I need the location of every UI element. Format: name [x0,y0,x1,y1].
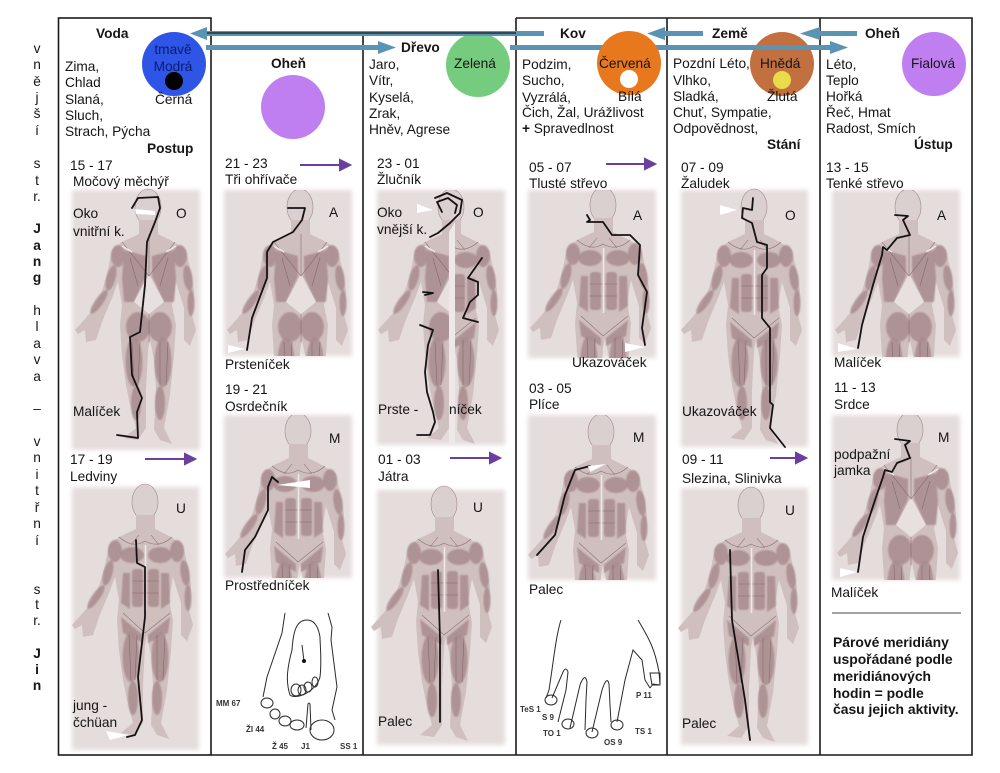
side label: vnější str. Jang hlava – vnitřní str. Jin: s [34,582,41,597]
arrow: purple to next column [606,159,655,169]
text block: qualities: Kyselá, [369,90,414,105]
side label: vnější str. Jang hlava – vnitřní str. Jin [33,41,41,693]
side label: vnější str. Jang hlava – vnitřní str. Jin: n [33,516,41,531]
diagram: hand with meridian points: P 11 [636,691,652,700]
meridian heading: Žaludek: Žaludek [681,176,730,191]
colour label: Zelená: Zelená [454,56,496,71]
panel: Oheň column [216,56,358,751]
figure: bladder meridian, back view: Oko [73,206,98,221]
figure: pericardium meridian, half body front [224,413,352,668]
figure: large intestine meridian, half body front [528,187,656,442]
meridian heading: Tři ohřívače: Tři ohřívače [225,172,297,187]
text block: qualities: Slaná, [65,92,104,107]
side label: vnější str. Jang hlava – vnitřní str. Jin: i [35,467,39,482]
meridian heading: Slezina, Slinivka: Slezina, Slinivka [682,471,782,486]
figure: small intestine meridian, half body back: A [937,208,947,223]
figure: bladder meridian, back view: vnitřní k. [73,224,125,239]
side label: vnější str. Jang hlava – vnitřní str. Jin: g [33,270,41,285]
diagram: hand with meridian points: OS 9 [604,738,623,747]
heading: Kov: Kov [560,26,586,41]
text block: qualities: Pozdní Léto, [673,56,750,71]
panel: Kov column [520,26,661,747]
meridian heading: Ledviny [70,452,117,484]
figure: stomach meridian, front view: O [785,208,796,223]
colour label: žlutá: Žlutá [767,89,798,104]
text block: qualities [65,59,151,139]
meridian heading: Močový měchýř: 15 - 17 [70,158,113,173]
text block: qualities: Chlad [65,75,101,90]
direction: Postup: Postup [147,141,193,156]
finger label: Ukazováček: Ukazováček [572,355,647,370]
side label: vnější str. Jang hlava – vnitřní str. Jin: í [35,123,39,138]
panel: Voda column [65,26,206,750]
figure: spleen meridian, front view [678,487,808,745]
element circle: červená [597,31,661,95]
figure: large intestine meridian, half body front: A [633,208,643,223]
side label: vnější str. Jang hlava – vnitřní str. Jin: n [33,450,41,465]
element circle: fialová [902,32,966,96]
organ colour dot: žlutá [773,71,791,89]
arrow: purple to next column [300,160,350,170]
direction: Ústup: Ústup [914,137,953,152]
figure: bladder meridian, back view: O [176,206,187,221]
side label: vnější str. Jang hlava – vnitřní str. Jin: n [33,254,41,269]
heading: Země: Země [712,26,748,41]
colour label: hnědá: Hnědá [760,56,801,71]
meridian heading: Tenké střevo [826,160,904,191]
heading: Oheň: Oheň [271,56,306,71]
figure: heart meridian, half body back [832,412,960,667]
figure: triple heater meridian, half body back [224,189,352,444]
diagram: hand with meridian points: TS 1 [635,727,652,736]
panel: Oheň column (right) [826,26,966,717]
side label: vnější str. Jang hlava – vnitřní str. Jin: h [33,303,41,318]
figure: kidney meridian, front view [72,484,199,750]
meridian heading: Žaludek: 07 - 09 [681,160,724,175]
panel: Země column [673,26,814,745]
side label: vnější str. Jang hlava – vnitřní str. Jin: i [35,662,39,677]
side label: vnější str. Jang hlava – vnitřní str. Jin: n [33,57,41,72]
side label: vnější str. Jang hlava – vnitřní str. Jin: a [33,336,41,351]
side label: vnější str. Jang hlava – vnitřní str. Jin: – [33,401,41,416]
text block: qualities: Zima, [65,59,99,74]
side label: vnější str. Jang hlava – vnitřní str. Jin: J [33,646,41,661]
note: paired meridians: času jejich aktivity. [833,701,959,717]
meridian heading: Plíce [529,381,572,412]
meridian heading: Tlusté střevo [529,160,608,191]
meridian heading: Tři ohřívače [225,156,297,187]
side label: vnější str. Jang hlava – vnitřní str. Jin: r. [33,189,41,204]
note: paired meridians: uspořádané podle [833,651,953,667]
side label: vnější str. Jang hlava – vnitřní str. Jin: v [34,41,41,56]
text block: qualities: Vyzrálá, [522,90,571,105]
element circle: zelená [446,33,510,97]
text block: qualities: Sucho, [522,73,565,88]
figure: stomach meridian, front view [681,189,808,447]
text block: qualities: Řeč, Hmat [826,105,891,120]
figure: kidney meridian, front view: čchüan [73,715,117,730]
figure: gall bladder meridian, half back half front view: vnější k. [377,222,427,237]
diagram: foot with meridian points: Ž 45 [272,742,289,751]
text block: qualities: Teplo [826,73,859,88]
meridian heading: Osrdečník: 19 - 21 [225,382,268,397]
organ colour dot: bílá [620,70,638,88]
meridian heading: Tři ohřívače: 21 - 23 [225,156,268,171]
side label: vnější str. Jang hlava – vnitřní str. Jin: l [35,319,39,334]
text block: qualities [826,57,916,136]
side label: vnější str. Jang hlava – vnitřní str. Jin: t [35,173,39,188]
meridian heading: Plíce: 03 - 05 [529,381,572,396]
finger label: Prsteníček: Prsteníček [225,357,290,372]
diagram: foot with meridian points: J1 [301,742,310,751]
side label: vnější str. Jang hlava – vnitřní str. Jin: v [34,434,41,449]
side label: vnější str. Jang hlava – vnitřní str. Jin: s [34,156,41,171]
text block: qualities: Čich, Žal, Urážlivost [522,105,644,120]
figure: triple heater meridian, half body back: A [329,205,339,220]
diagram: foot with meridian points [216,613,358,751]
text block: qualities: Sluch, [65,108,103,123]
text block: qualities: Sladká, [673,89,719,104]
organ colour dot: černá [165,72,183,90]
side label: vnější str. Jang hlava – vnitřní str. Jin: ř [35,500,40,515]
figure: pericardium meridian, half body front: M [329,431,340,446]
note: paired meridians [833,634,959,717]
meridian heading: Žlučník: 23 - 01 [377,156,420,171]
figure: heart meridian, half body back: jamka [833,463,871,478]
side label: vnější str. Jang hlava – vnitřní str. Jin: t [35,597,39,612]
figure: spleen meridian, front view: Palec [682,716,716,731]
figure: gall bladder meridian, half back half front view: O [473,205,484,220]
side label: vnější str. Jang hlava – vnitřní str. Jin: í [35,533,39,548]
figure: bladder meridian, back view [72,189,200,450]
colour label: tmavě modrá: tmavě [154,42,192,57]
diagram: foot with meridian points: ŽI 44 [246,725,265,734]
side label: vnější str. Jang hlava – vnitřní str. Jin: n [33,678,41,693]
figure: heart meridian, half body back: M [938,430,949,445]
figure: liver meridian, front view: U [473,500,483,515]
meridian heading: Játra: 01 - 03 [378,452,421,467]
meridian heading: Močový měchýř: Močový měchýř [73,174,169,189]
note: paired meridians: Párové meridiány [833,634,949,650]
side label: vnější str. Jang hlava – vnitřní str. Jin: a [33,238,41,253]
text block: qualities: Vítr, [369,73,393,88]
side label: vnější str. Jang hlava – vnitřní str. Jin: t [35,483,39,498]
text block: qualities: Léto, [826,57,856,72]
figure: liver meridian, front view [371,486,505,745]
meridian heading: Močový měchýř [70,158,169,189]
figure: lung meridian, half body front: M [633,430,644,445]
diagram: foot with meridian points: MM 67 [216,699,241,708]
meridian heading: Srdce: Srdce [834,397,870,412]
meridian heading: Žlučník [377,156,421,187]
figure: stomach meridian, front view: Ukazováček [682,404,757,419]
side label: vnější str. Jang hlava – vnitřní str. Jin: š [34,106,41,121]
arrow: purple to next column [770,453,806,463]
side label: vnější str. Jang hlava – vnitřní str. Jin: J [33,221,41,236]
finger label: Malíček: Malíček [834,355,881,370]
figure: spleen meridian, front view: U [785,503,795,518]
text block: qualities: Podzim, [522,57,571,72]
meridian heading: Ledviny: Ledviny [70,469,117,484]
colour label: fialová: Fialová [911,56,956,71]
meridian heading: Osrdečník [225,382,288,414]
text block: qualities: Jaro, [369,57,399,72]
arrows: blue cycle arrows between elements [190,27,857,54]
diagram: hand with meridian points: TO 1 [543,729,561,738]
meridian heading: Žlučník: Žlučník [377,172,421,187]
finger label: Palec: Palec [529,582,563,597]
colour label: černá: Černá [155,92,193,107]
meridian heading: Slezina, Slinivka [682,452,782,486]
text block: qualities: Odpovědnost, [673,121,758,136]
heading: Voda: Voda [96,26,129,41]
diagram: foot with meridian points: SS 1 [340,742,358,751]
colour label: tmavě modrá: Modrá [154,59,193,74]
side label: vnější str. Jang hlava – vnitřní str. Jin: r. [33,613,41,628]
meridian heading: Srdce: 11 - 13 [834,380,876,395]
heading: Oheň: Oheň [865,26,900,41]
figure: gall bladder meridian, half back half front view: Prste - [378,402,418,417]
meridian heading: Tenké střevo: 13 - 15 [826,160,869,175]
figure: kidney meridian, front view: U [176,501,186,516]
text block: qualities [369,57,450,137]
finger label: Malíček: Malíček [831,585,878,600]
text block: qualities: Hořká [826,89,863,104]
text block: qualities: Chuť, Sympatie, [673,105,772,120]
panel: Dřevo column [369,33,510,745]
text block: qualities: Zrak, [369,106,400,121]
figure: bladder meridian, back view: Malíček [73,404,120,419]
colour label: bílá: Bílá [618,89,642,104]
meridian heading: Plíce: Plíce [529,397,559,412]
figure: kidney meridian, front view: jung - [72,698,107,713]
figure: gall bladder meridian, half back half front view: níček [449,402,482,417]
meridian heading: Játra [378,452,421,484]
arrow: purple to next column [145,454,195,464]
element circle: fialová [261,75,325,139]
heading: Dřevo: Dřevo [401,40,440,55]
figure: heart meridian, half body back: podpažní [834,447,891,462]
element circle: tmavě modrá [142,32,206,96]
meridian heading: Tenké střevo: Tenké střevo [826,176,904,191]
note: paired meridians: meridiánových [833,668,931,684]
side label: vnější str. Jang hlava – vnitřní str. Jin: v [34,352,41,367]
text block: qualities: Hněv, Agrese [369,122,450,137]
diagram: hand with meridian points: S 9 [542,713,555,722]
side label: vnější str. Jang hlava – vnitřní str. Jin: a [33,369,41,384]
diagram: hand with meridian points: TeS 1 [520,705,541,714]
figure: gall bladder meridian, half back half front view: Oko [377,205,402,220]
diagram: hand with meridian points [520,620,660,747]
meridian heading: Slezina, Slinivka: 09 - 11 [682,452,724,467]
meridian heading: Játra: Játra [378,469,409,484]
meridian heading: Tlusté střevo: Tlusté střevo [529,176,608,191]
text block: qualities: Strach, Pýcha [65,124,151,139]
text block: qualities: Radost, Smích [826,121,916,136]
side label: vnější str. Jang hlava – vnitřní str. Jin: j [34,90,39,105]
text block: qualities [522,57,644,136]
colour label: tmavě modrá [154,42,193,74]
colour label: červená: Červená [599,56,651,71]
figure: small intestine meridian, half body back [832,189,960,444]
figure: gall bladder meridian, half back half front view [377,189,505,445]
element circle: hnědá [750,32,814,96]
text block: qualities: + Spravedlnost [522,121,614,136]
text block: qualities: Vlhko, [673,73,711,88]
text block: qualities [673,56,772,136]
figure: liver meridian, front view: Palec [378,714,412,729]
meridian heading: Srdce [834,380,876,412]
meridian heading: Tlusté střevo: 05 - 07 [529,160,572,175]
side label: vnější str. Jang hlava – vnitřní str. Jin: ě [33,74,41,89]
direction: Stání: Stání [767,137,802,152]
note: paired meridians: hodin = podle [833,685,924,701]
meridian heading: Osrdečník: Osrdečník [225,399,288,414]
meridian heading: Žaludek [681,160,730,191]
arrow: purple to next column [450,453,500,463]
figure: lung meridian, half body front [528,414,656,669]
finger label: Prostředníček: Prostředníček [225,578,310,593]
meridian heading: Ledviny: 17 - 19 [70,452,113,467]
